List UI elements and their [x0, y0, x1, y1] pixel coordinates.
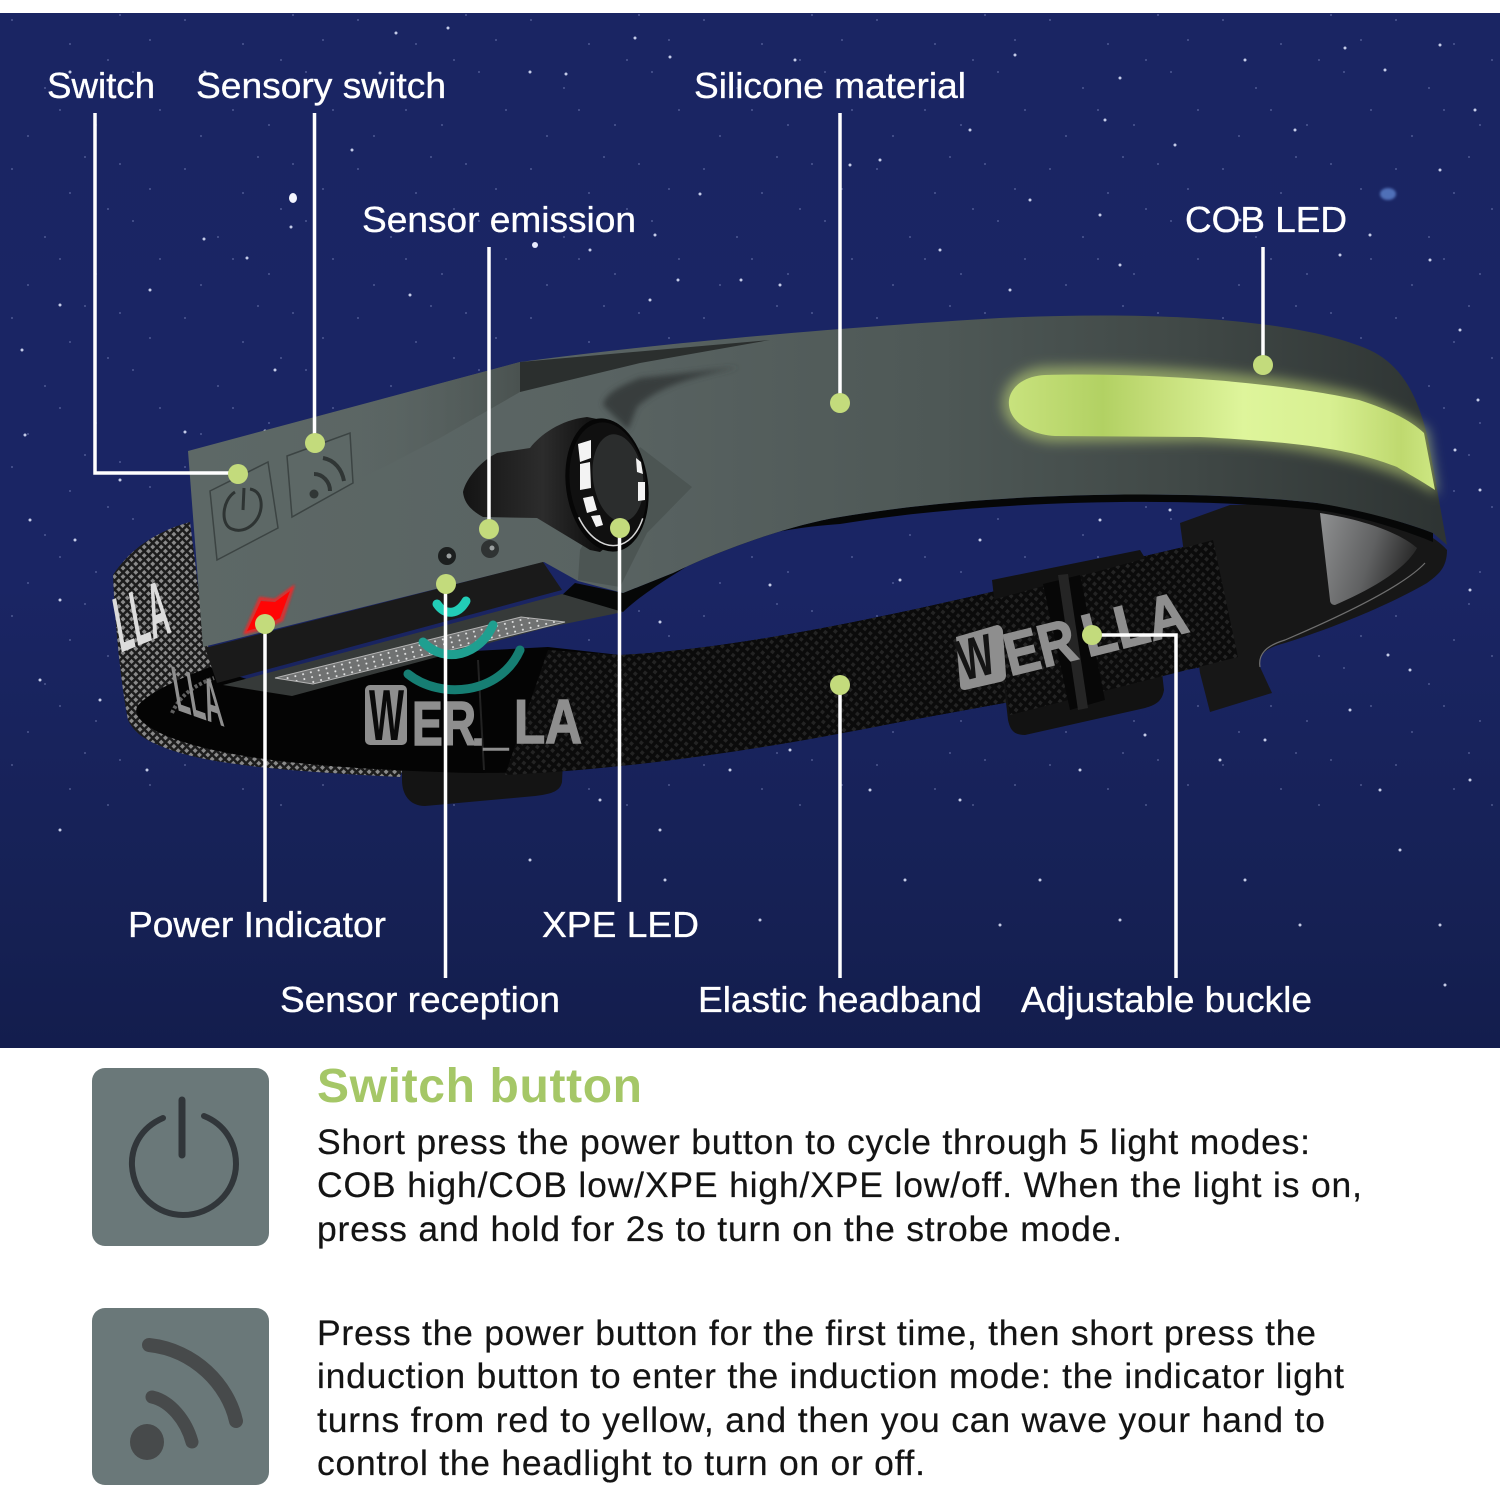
- callout labels: Sensory switch: [196, 65, 446, 106]
- icon: power button: [92, 1068, 269, 1246]
- power button on body: [210, 462, 278, 560]
- headlamp illustration: [108, 316, 1447, 806]
- adjustable buckle and strap lettering: LLA: [1075, 579, 1194, 670]
- text block: switch button instructions: press and hold for 2s to turn on the strobe mode.: [317, 1209, 1122, 1249]
- red power indicator glow: [245, 587, 293, 633]
- sensor wave arcs: [408, 601, 520, 690]
- night sky background: [0, 13, 1500, 1048]
- strap lettering centre: ER: [412, 690, 476, 759]
- strap lettering left: LLA: [167, 652, 228, 741]
- adjustable buckle and strap lettering: [950, 540, 1238, 735]
- callout labels: Power Indicator: [128, 904, 386, 945]
- callout lines and dots: [95, 113, 1273, 978]
- text block: switch button instructions: Short press the power button to cycle through 5 light modes:: [317, 1122, 1310, 1162]
- underside and side LED strip: [223, 594, 623, 696]
- text block: induction mode instructions: turns from red to yellow, and then you can wave your hand to: [317, 1400, 1325, 1440]
- callout labels: [47, 65, 1347, 1020]
- adjustable buckle and strap lettering: W: [950, 622, 1001, 694]
- text block: switch button instructions: [317, 1122, 1362, 1249]
- callout labels: Switch: [47, 65, 155, 106]
- front buckle: [402, 760, 563, 806]
- text block: induction mode instructions: Press the power button for the first time, then short press the: [317, 1313, 1316, 1353]
- sensor eyes: [438, 540, 499, 565]
- black lower edge of the band: [560, 495, 1433, 612]
- text block: induction mode instructions: [317, 1313, 1344, 1483]
- distant bright stars: [289, 188, 1396, 248]
- text block: switch button instructions: COB high/COB low/XPE high/XPE low/off. When the light is on,: [317, 1165, 1362, 1205]
- strap black inner and weave: [136, 538, 1240, 775]
- text block: induction mode instructions: control the headlight to turn on or off.: [317, 1443, 925, 1483]
- lens mount shadow: [578, 447, 692, 587]
- callout labels: COB LED: [1185, 199, 1347, 240]
- rear strap loop: [113, 522, 430, 777]
- strap lettering centre: [365, 676, 582, 759]
- callout labels: Sensor emission: [362, 199, 636, 240]
- callout labels: Sensor reception: [280, 979, 560, 1020]
- XPE LED lens: [463, 413, 657, 557]
- adjustable buckle and strap lettering: ER: [997, 606, 1083, 689]
- text block: induction mode instructions: induction button to enter the induction mode: the indicator light: [317, 1356, 1344, 1396]
- strap lettering centre: LA: [514, 688, 582, 757]
- callout labels: Adjustable buckle: [1021, 979, 1312, 1020]
- heading: switch button: Switch button: [317, 1060, 642, 1113]
- COB LED strip: [1003, 366, 1438, 495]
- strap lettering centre: W: [369, 676, 404, 756]
- swoosh shadow above lens: [603, 367, 740, 430]
- black lower strip: [205, 562, 562, 683]
- icon: sensor waves: [92, 1308, 269, 1485]
- callout labels: Elastic headband: [698, 979, 982, 1020]
- strap lettering left: [108, 564, 228, 741]
- upper dark facet: [520, 340, 770, 392]
- strap lettering left: LLA: [108, 564, 175, 670]
- rear clip and inner band: [1180, 503, 1447, 712]
- callout labels: XPE LED: [542, 904, 699, 945]
- strap lettering centre: ._: [472, 710, 509, 754]
- housing upper facet: [188, 362, 520, 530]
- callout labels: Silicone material: [694, 65, 966, 106]
- main silicone band and housing: [188, 316, 1447, 647]
- sensory button on body: [287, 433, 353, 517]
